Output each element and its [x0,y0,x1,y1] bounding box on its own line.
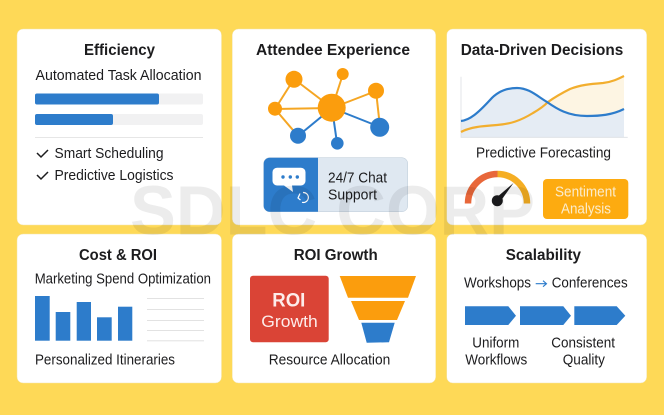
text: marketing spend optimization: Marketing Spend Optimization [35,271,211,287]
progress bar one [35,94,203,104]
text: consistent quality: Consistent [551,336,615,352]
text: 24/7 chat support: 24/7 Chat [328,171,387,187]
text: uniform workflows [465,336,527,368]
button: sentiment analysis [543,179,628,219]
progress bar two [35,114,203,125]
badge: roi growth [250,276,329,342]
line chart: predictive forecasting [461,76,628,137]
panel: data-driven decisions [447,29,647,225]
text: personalized itineraries: Personalized Itineraries [35,352,175,368]
badge: roi growth: Growth [261,313,318,331]
checklist item: predictive logistics: Predictive Logistics [54,168,174,184]
text: automated task allocation: Automated Task Allocation [36,68,202,84]
text: uniform workflows: Workflows [465,352,527,368]
heading: scalability: Scalability [506,247,581,264]
badge: roi growth: ROI [272,291,305,312]
gauge [468,174,527,206]
funnel [340,276,416,343]
heading: roi growth: ROI Growth [294,247,378,264]
panel: roi growth [232,234,436,383]
text: workshops to conferences: Workshops [464,276,531,292]
text: consistent quality: Quality [563,352,606,368]
text: resource allocation: Resource Allocation [269,352,390,368]
panel: cost and roi [17,234,222,383]
icon: chat bubble [272,168,308,202]
heading: attendee experience: Attendee Experience [256,42,410,59]
heading: cost and roi: Cost & ROI [79,247,157,264]
button: sentiment analysis: Analysis [561,201,611,217]
panel: scalability [447,234,647,383]
text: workshops to conferences: Conferences [552,276,628,292]
text: 24/7 chat support: Support [328,188,377,204]
heading: efficiency: Efficiency [84,42,155,59]
text: workshops to conferences [464,276,628,292]
panel: efficiency [17,29,222,225]
panel: attendee experience [232,29,436,225]
text: consistent quality [551,336,615,368]
watermark: SDLC CORP [130,172,535,250]
text: predictive forecasting: Predictive Forecasting [476,146,611,162]
callout: chat support [264,158,408,212]
process arrows [465,306,625,325]
bar chart [35,296,204,341]
button: sentiment analysis: Sentiment [555,185,616,201]
heading: data-driven decisions: Data-Driven Decisions [461,42,623,59]
text: 24/7 chat support [328,171,387,204]
text: uniform workflows: Uniform [472,336,519,352]
network diagram [268,68,389,150]
checklist item: smart scheduling: Smart Scheduling [54,146,164,162]
